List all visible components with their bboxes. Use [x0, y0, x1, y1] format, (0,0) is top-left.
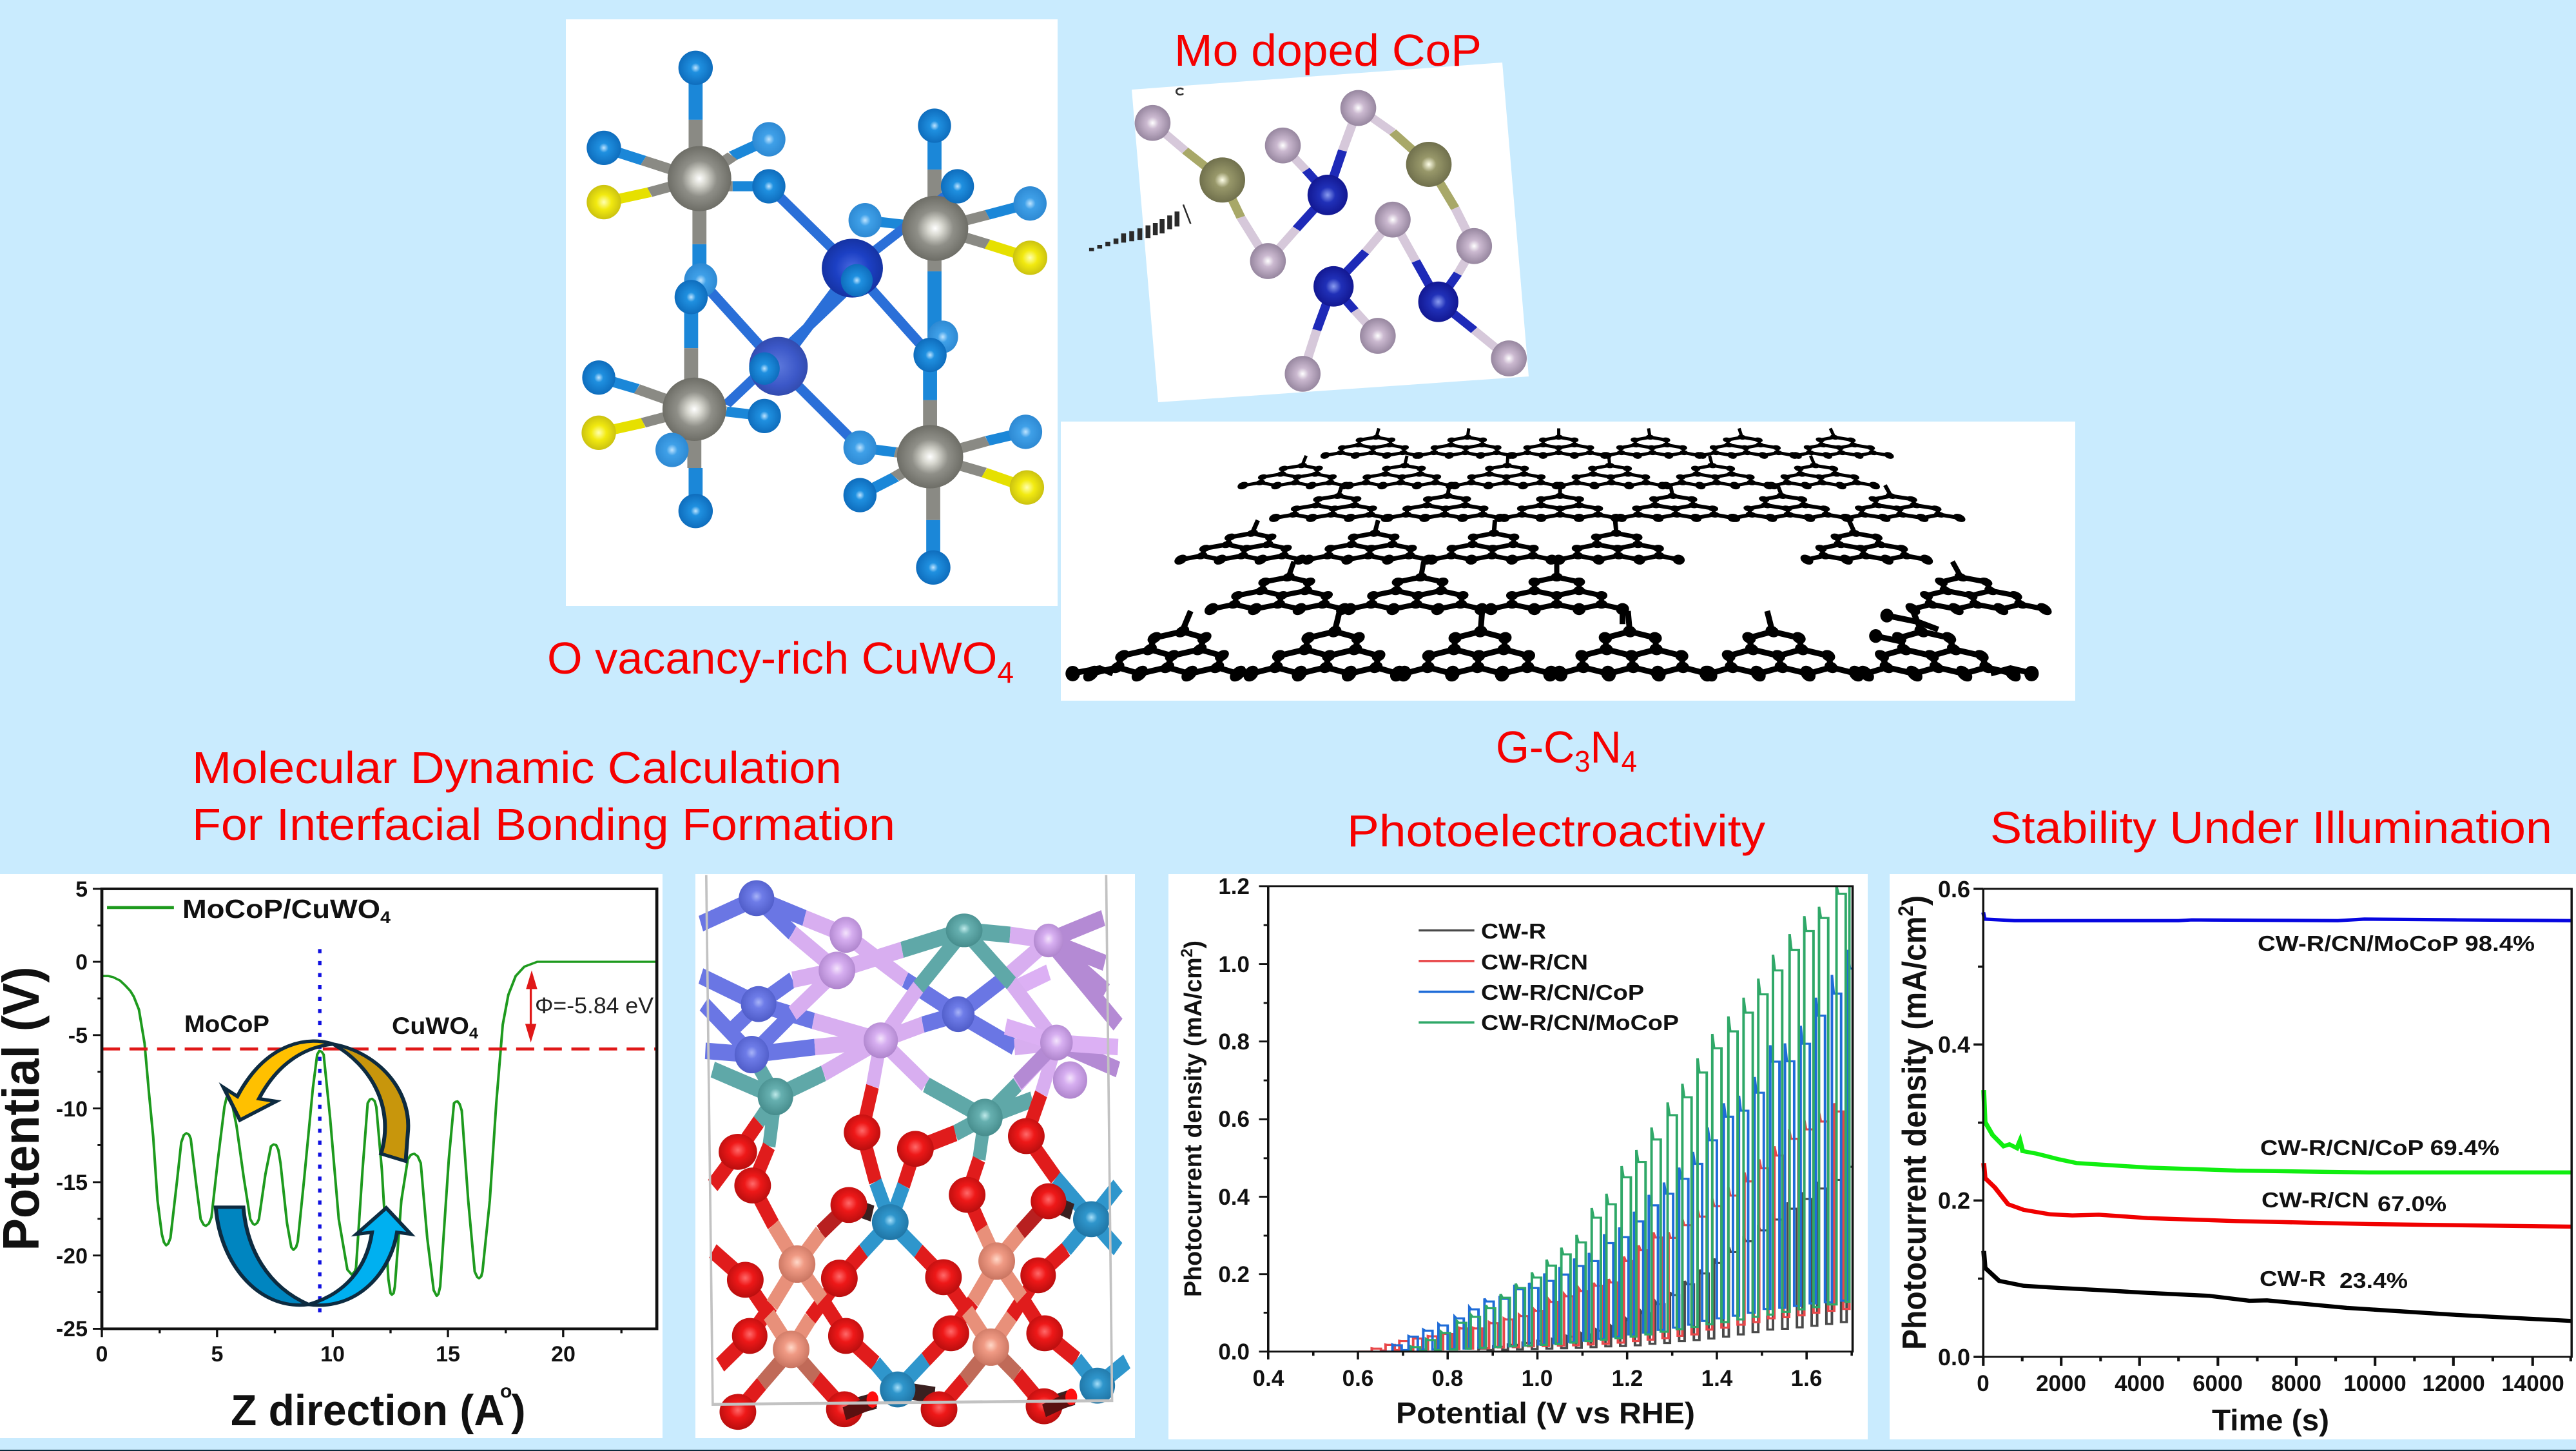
row 6: [1065, 609, 2039, 681]
panel: stability chart: 23.4%: [2339, 1269, 2408, 1292]
axis titles and curve labels: Time (s): [2212, 1403, 2329, 1437]
ticks text: 0.8: [1218, 1029, 1250, 1055]
heading: molecular dynamic calculation: [192, 743, 895, 850]
ticks text: 0.4: [1218, 1185, 1250, 1210]
panel: potential chart: ): [511, 1386, 526, 1435]
curve: CW-R/CN: [1358, 1098, 1850, 1352]
panel: potential chart: 4: [380, 908, 391, 927]
ticks text: 0.4: [1938, 1031, 1970, 1058]
panel: potential chart: 10: [320, 1342, 345, 1367]
arrow: blue circulation: [216, 1207, 309, 1305]
panel: stability chart: 10000: [2343, 1371, 2407, 1396]
panel: photoelectroactivity chart: 1.0: [1522, 1366, 1553, 1391]
panel: photoelectroactivity chart: 1.6: [1791, 1366, 1822, 1391]
panel: photoelectroactivity chart: CW-R/CN: [1481, 950, 1588, 974]
panel: photoelectroactivity chart: CW-R/CN/MoCoP: [1481, 1011, 1679, 1035]
curve: CW-R/CN/MoCoP: [1404, 886, 1850, 1352]
panel: potential chart: 4: [469, 1025, 479, 1042]
row 4: [1172, 520, 1935, 565]
double arrow: [529, 976, 532, 1038]
row 3: [1268, 485, 1967, 522]
ticks text: 1.0: [1218, 952, 1250, 977]
frame and ticks: [1268, 886, 1853, 1352]
panel: potential chart: 0: [96, 1342, 108, 1367]
label: G-C3N4: N: [1591, 722, 1622, 772]
axis labels and ticks: -10: [56, 1097, 88, 1122]
panel: stability chart: Photocurrent density (mA/cm: [1896, 881, 1933, 1350]
red dashed level: [102, 1046, 657, 1051]
panel: potential chart: Φ=-5.84 eV: [535, 993, 654, 1018]
heading: molecular dynamic calculation: For Interfacial Bonding Formation: [192, 799, 895, 850]
back bonds: [701, 898, 1127, 1412]
bonds: [599, 68, 1030, 567]
curve: CW-R/CN/CoP: [1381, 949, 1854, 1352]
atoms: [668, 146, 731, 211]
panel: photoelectroactivity chart: CW-R/CN/CoP: [1481, 980, 1644, 1004]
panel: stability chart: CW-R: [2260, 1267, 2326, 1290]
ticks text: 0.6: [1938, 876, 1970, 902]
panel: stability chart: 6000: [2193, 1371, 2243, 1396]
row 2: [1236, 456, 1881, 489]
panel: potential chart: CuWO: [392, 1013, 465, 1039]
arrow: yellow circulation: [216, 1041, 411, 1305]
heading: photoelectroactivity: Photoelectroactivity: [1347, 806, 1765, 856]
panel: stability chart: 12000: [2422, 1371, 2485, 1396]
axis labels and ticks: 0: [75, 950, 88, 975]
panel: photoelectroactivity chart: [1168, 874, 1868, 1439]
panel: stability chart: [1890, 874, 2576, 1439]
heading: molecular dynamic calculation: Molecular Dynamic Calculation: [192, 743, 842, 793]
bonds: [1152, 108, 1509, 374]
panel: stability chart: 2000: [2036, 1371, 2086, 1396]
curve: CW-R/CN/MoCoP: [1983, 912, 2571, 920]
panel: stability chart: CW-R/CN: [2261, 1188, 2369, 1212]
panel: photoelectroactivity chart: 1.2: [1612, 1366, 1643, 1391]
panel: potential chart: 20: [551, 1342, 576, 1367]
ticks text: 0.0: [1218, 1339, 1250, 1365]
panel: interface atomic model: [695, 874, 1135, 1438]
axis labels and ticks: [56, 877, 88, 1341]
panel: stability chart: CW-R/CN/CoP 69.4%: [2260, 1136, 2499, 1160]
panel: stability chart: 4000: [2115, 1371, 2165, 1396]
curve: CW-R/CN: [1984, 1163, 2571, 1227]
axis titles and legend: Potential (V vs RHE): [1396, 1396, 1695, 1430]
label: G-C3N4: G-C: [1496, 722, 1578, 772]
panel: O vacancy-rich CuWO4 crystal structure: [566, 19, 1058, 606]
legend lines: [1419, 930, 1475, 1022]
frame and ticks: [1983, 889, 2571, 1357]
atoms: [1135, 90, 1527, 392]
curve: CW-R/CN/CoP: [1984, 1090, 2571, 1173]
label: Mo doped CoP: Mo doped CoP: [1174, 25, 1482, 75]
c axis mark: [1176, 88, 1183, 95]
label: O vacancy-rich CuWO4: O vacancy-rich CuWO: [547, 633, 996, 683]
ticks text: 0.2: [1218, 1262, 1250, 1287]
panel: potential chart: MoCoP/CuWO: [182, 894, 362, 924]
ticks text: [1938, 876, 1970, 1370]
ticks text: 0.0: [1938, 1344, 1970, 1370]
panel: potential chart: [0, 874, 663, 1438]
panel: photoelectroactivity chart: 0.6: [1342, 1366, 1373, 1391]
panel: potential chart: 15: [436, 1342, 460, 1367]
panel: photoelectroactivity chart: ): [1180, 940, 1207, 949]
curve: CW-R: [1478, 1160, 1853, 1350]
ticks text: 0.2: [1938, 1187, 1970, 1214]
panel: photoelectroactivity chart: 2: [1178, 949, 1196, 957]
panel: potential chart: Z direction (A: [231, 1386, 505, 1435]
panel: potential chart: o: [500, 1381, 512, 1402]
panel: g-C3N4 network: [1061, 422, 2075, 701]
panel: stability chart: CW-R/CN/MoCoP 98.4%: [2258, 931, 2535, 955]
axis labels and ticks: -20: [56, 1244, 88, 1269]
panel: Mo doped CoP structure: [1092, 63, 1529, 402]
row 5: [1203, 561, 2054, 615]
ticks text: 1.2: [1218, 874, 1250, 899]
panel: stability chart: ): [1896, 895, 1933, 906]
panel: stability chart: 67.0%: [2377, 1192, 2446, 1216]
panel: photoelectroactivity chart: 0.4: [1253, 1366, 1284, 1391]
panel: stability chart: 2: [1894, 906, 1917, 916]
frame and ticks: [102, 889, 657, 1329]
label: G-C3N4: 4: [1622, 745, 1637, 778]
hashed bond: [1092, 204, 1190, 251]
panel: photoelectroactivity chart: Photocurrent density (mA/cm: [1180, 954, 1207, 1297]
panel: stability chart: 0: [1977, 1371, 1990, 1396]
legend line: [107, 905, 174, 910]
blue dotted line: [317, 949, 322, 1312]
ticks text: [1218, 874, 1250, 1365]
axis labels and ticks: -15: [56, 1171, 88, 1195]
panel: stability chart: 14000: [2501, 1371, 2564, 1396]
label: O vacancy-rich CuWO4: 4: [997, 656, 1014, 689]
axis labels and ticks: -5: [68, 1024, 88, 1048]
label: G-C3N4: 3: [1574, 745, 1591, 778]
potential curve: [102, 962, 657, 1296]
panel: photoelectroactivity chart: 1.4: [1701, 1366, 1733, 1391]
panel: potential chart: MoCoP: [184, 1011, 269, 1037]
panel: potential chart: 5: [211, 1342, 223, 1367]
panel: photoelectroactivity chart: CW-R: [1481, 919, 1546, 943]
row 1: [1319, 428, 1895, 459]
heading: stability under illumination: Stability Under Illumination: [1990, 803, 2552, 853]
panel: stability chart: 8000: [2271, 1371, 2321, 1396]
unit cell frame: [706, 875, 1112, 1405]
ticks text: 0.6: [1218, 1107, 1250, 1132]
curve: CW-R: [1984, 1251, 2571, 1321]
axis labels and ticks: -25: [56, 1317, 88, 1341]
axis labels and ticks: 5: [75, 877, 88, 902]
panel: photoelectroactivity chart: 0.8: [1432, 1366, 1463, 1391]
atoms: [719, 881, 1115, 1430]
